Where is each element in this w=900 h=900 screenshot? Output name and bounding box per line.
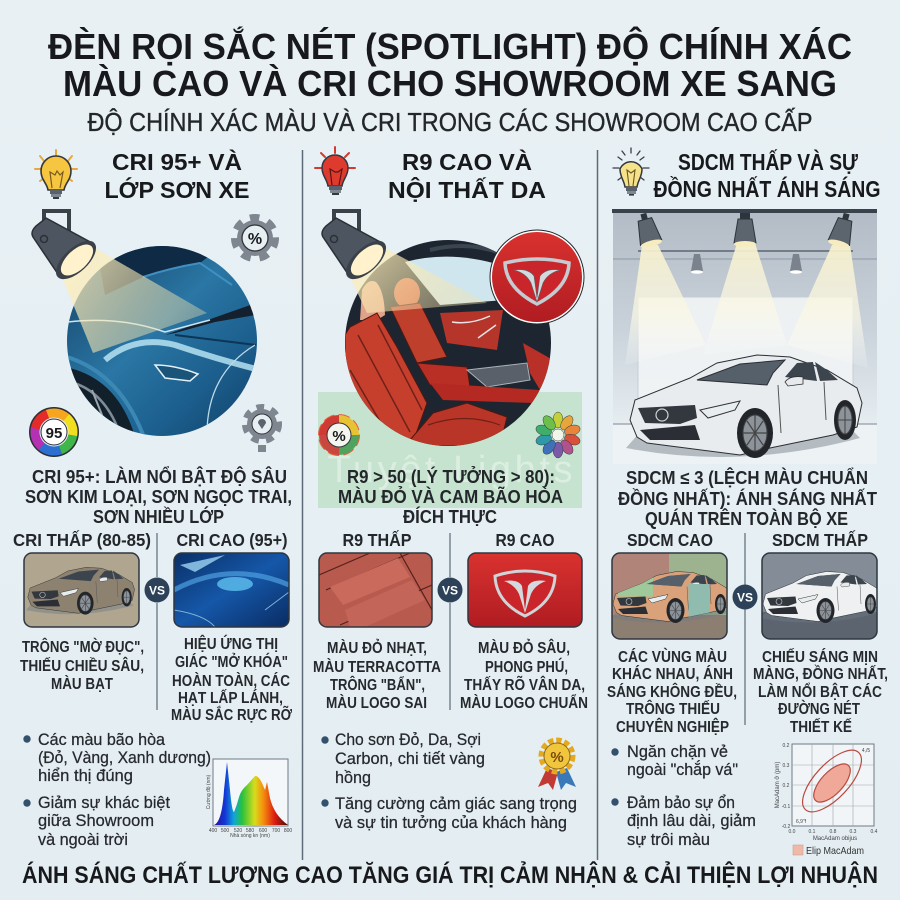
icon: CRI 95 colour wheel: 95 xyxy=(46,425,62,442)
VS badge xyxy=(438,578,462,602)
comparison: high R9: MÀU ĐỎ SÂU, xyxy=(478,639,570,657)
heading: R9 cao và nội thất da: NỘI THẤT DA xyxy=(388,176,546,203)
icon: gear percent: % xyxy=(248,231,262,248)
bullet list: R9: và sự tin tưởng của khách hàng xyxy=(335,813,567,832)
column dividers xyxy=(157,150,745,860)
bullet list: SDCM: sự trôi màu xyxy=(627,830,710,849)
heading: SDCM thấp và sự đồng nhất ánh sáng: SDCM THẤP VÀ SỰ xyxy=(678,148,858,175)
comparison: low CRI: THIẾU CHIỀU SÂU, xyxy=(20,657,144,675)
description: SDCM xyxy=(618,467,877,529)
chart: MacAdam ellipse: -0.1 xyxy=(782,804,791,810)
chart: light spectrum: 800 xyxy=(284,828,292,834)
chart: MacAdam ellipse: 0.3 xyxy=(850,829,857,835)
light beam xyxy=(62,247,207,353)
bullet list: SDCM: ngoài "chắp vá" xyxy=(627,760,738,779)
comparison: low SDCM: SDCM THẤP xyxy=(772,529,868,550)
title xyxy=(48,25,852,104)
bullet list: CRI: Các màu bão hòa xyxy=(38,730,166,749)
VS badge xyxy=(732,584,758,610)
comparison: low CRI xyxy=(13,529,151,693)
watermark xyxy=(318,392,582,508)
icon: gear pin xyxy=(247,409,277,452)
comparison: high CRI: HIỆU ỨNG THỊ xyxy=(184,635,278,653)
car paint close-up circle xyxy=(67,246,257,436)
description: CRI 95+: SƠN NHIỀU LỚP xyxy=(93,506,224,527)
VS badge: VS xyxy=(442,584,458,598)
icon: medal: % xyxy=(550,749,564,766)
description: R9: R9 > 50 (LÝ TƯỞNG > 80): xyxy=(347,466,555,487)
heading: R9 cao và nội thất da xyxy=(388,148,546,203)
description: CRI 95+ xyxy=(25,466,292,527)
showroom scene xyxy=(612,209,877,464)
chart: MacAdam ellipse: Elip MacAdam xyxy=(806,845,864,857)
watermark: Tuyệt Lights xyxy=(328,449,572,491)
chart: light spectrum: 500 xyxy=(221,828,229,834)
comparison: high SDCM: CÁC VÙNG MÀU xyxy=(618,648,727,666)
comparison: high SDCM: KHÁC NHAU, ÁNH xyxy=(612,666,733,683)
VS badge: VS xyxy=(149,584,165,598)
comparison: low CRI: CRI THẤP (80-85) xyxy=(13,529,151,550)
track lights xyxy=(633,211,857,274)
subtitle: ĐỘ CHÍNH XÁC MÀU VÀ CRI TRONG CÁC SHOWROOM CAO CẤP xyxy=(88,107,812,137)
description: CRI 95+: SƠN KIM LOẠI, SƠN NGỌC TRAI, xyxy=(25,487,292,507)
chart: light spectrum: 400 xyxy=(209,828,217,834)
comparison: high CRI: HẠT LẤP LÁNH, xyxy=(178,690,283,707)
chart: light spectrum: 520 xyxy=(234,828,242,834)
chart: MacAdam ellipse: MacAdam ở (pm) xyxy=(774,762,781,808)
icon: pale light bulb xyxy=(613,148,649,196)
comparison: high CRI: MÀU SẮC RỰC RỠ xyxy=(171,706,293,724)
description: R9: MÀU ĐỎ VÀ CAM BÃO HÒA xyxy=(338,486,563,507)
heading: CRI 95+ và lớp sơn xe xyxy=(104,148,250,203)
bullet list: SDCM: Đảm bảo sự ổn xyxy=(627,793,735,812)
chart: light spectrum: 580 xyxy=(246,828,254,834)
bullet list: SDCM xyxy=(611,742,756,849)
icon: spotlight xyxy=(322,211,392,286)
icon: medal xyxy=(538,742,576,790)
chart: MacAdam ellipse: 0.2 xyxy=(783,783,790,789)
icon: gear percent xyxy=(237,220,273,256)
comparison: low SDCM: THIẾT KẾ xyxy=(790,719,852,736)
icon: colour flower xyxy=(535,412,581,458)
description: R9 xyxy=(338,466,563,527)
panel: R9 and leather interior xyxy=(313,147,588,832)
bullet list: R9: Cho sơn Đỏ, Da, Sợi xyxy=(335,730,481,749)
bullet list: SDCM: Ngăn chặn vẻ xyxy=(627,742,728,761)
comparison: high SDCM: SDCM CAO xyxy=(627,530,713,550)
comparison: high R9 xyxy=(460,530,588,712)
description: SDCM: ĐỒNG NHẤT): ÁNH SÁNG NHẤT xyxy=(618,488,877,509)
white car xyxy=(626,355,862,458)
comparison: high CRI: CRI CAO (95+) xyxy=(176,530,288,550)
chart: MacAdam ellipse: 0.3 xyxy=(783,763,790,769)
leather interior circle xyxy=(340,240,555,450)
description: SDCM: QUÁN TRÊN TOÀN BỘ XE xyxy=(645,508,848,529)
icon: spotlight xyxy=(32,211,102,286)
chart: MacAdam ellipse: 4,/5 xyxy=(862,748,870,754)
bullet list: CRI: giữa Showroom xyxy=(38,811,154,830)
chart: light spectrum: 700 xyxy=(272,828,280,834)
title: ĐÈN RỌI SẮC NÉT (SPOTLIGHT) ĐỘ CHÍNH XÁC xyxy=(48,25,852,67)
panel: SDCM and light uniformity xyxy=(607,148,888,857)
bullet list: CRI: Giảm sự khác biệt xyxy=(38,793,170,812)
chart: light spectrum: Cường độ (nm) xyxy=(206,774,212,809)
comparison: low R9: R9 THẤP xyxy=(342,529,412,550)
panel: CRI 95+ and car paint xyxy=(13,148,293,849)
chart: MacAdam ellipse: -0.2 xyxy=(782,824,791,830)
bullet list: R9: Tăng cường cảm giác sang trọng xyxy=(335,794,577,813)
comparison: low SDCM: ĐƯỜNG NÉT xyxy=(778,700,860,718)
icon: colourful percent gear xyxy=(319,415,359,455)
chart: MacAdam ellipse: 0.2 xyxy=(783,743,790,749)
description: CRI 95+: CRI 95+: LÀM NỔI BẬT ĐỘ SÂU xyxy=(32,466,287,487)
comparison: low R9: MÀU ĐỎ NHẠT, xyxy=(327,639,427,657)
bullet list: R9: Carbon, chi tiết vàng xyxy=(335,749,485,768)
comparison: high R9: R9 CAO xyxy=(496,530,554,550)
description: R9: ĐÍCH THỰC xyxy=(403,506,497,527)
comparison: low R9 xyxy=(313,529,441,712)
chart: light spectrum: Nhà sóng kn (nm) xyxy=(230,833,270,839)
VS badge xyxy=(144,578,170,602)
comparison: low R9: MÀU LOGO SAI xyxy=(326,695,427,712)
comparison: low R9: TRÔNG "BẨN", xyxy=(330,676,425,694)
comparison: high SDCM: TRÔNG THIẾU xyxy=(626,700,720,718)
comparison: high SDCM: CHUYÊN NGHIỆP xyxy=(616,718,729,736)
chart: MacAdam ellipse: 0.4 xyxy=(871,829,878,835)
description: SDCM: SDCM ≤ 3 (LỆCH MÀU CHUẨN xyxy=(626,467,868,488)
chart: MacAdam ellipse: MacAdam obijus xyxy=(813,836,857,842)
bullet list: CRI: (Đỏ, Vàng, Xanh dương) xyxy=(38,748,211,767)
comparison: high R9: THẤY RÕ VÂN DA, xyxy=(464,676,585,694)
chart: MacAdam ellipse: 0.8 xyxy=(830,829,837,835)
comparison: low SDCM xyxy=(753,529,888,736)
chart: light spectrum: 600 xyxy=(259,828,267,834)
comparison: high R9: MÀU LOGO CHUẨN xyxy=(460,694,588,712)
icon: yellow light bulb xyxy=(35,150,77,199)
comparison: low SDCM: LÀM NỔI BẬT CÁC xyxy=(758,683,882,701)
comparison: low SDCM: CHIẾU SÁNG MỊN xyxy=(762,649,878,666)
icon: CRI 95 colour wheel xyxy=(27,405,81,459)
bullet list: R9 xyxy=(321,730,577,832)
comparison: low CRI: MÀU BẠT xyxy=(51,676,113,693)
comparison: low CRI: TRÔNG "MỜ ĐỤC", xyxy=(22,638,144,656)
chart: MacAdam ellipse xyxy=(774,741,878,857)
light beam xyxy=(350,247,487,313)
bullet list: CRI xyxy=(23,730,211,849)
chart: MacAdam ellipse: 0.0 xyxy=(789,829,796,835)
chart: MacAdam ellipse: 6,9"f xyxy=(796,819,807,825)
comparison: high CRI: GIÁC "MỞ KHÓA" xyxy=(175,653,288,671)
heading: SDCM thấp và sự đồng nhất ánh sáng xyxy=(654,148,880,202)
logo badge xyxy=(490,230,584,324)
bullet list: R9: hồng xyxy=(335,768,371,787)
bullet list: SDCM: định lâu dài, giảm xyxy=(627,811,756,830)
comparison: high SDCM: SÁNG KHÔNG ĐỀU, xyxy=(607,683,737,701)
chart: light spectrum xyxy=(206,759,292,839)
bullet list: CRI: và ngoài trời xyxy=(38,830,128,849)
bullet list: CRI: hiển thị đúng xyxy=(38,766,133,785)
heading: R9 cao và nội thất da: R9 CAO VÀ xyxy=(402,148,532,175)
heading: CRI 95+ và lớp sơn xe: LỚP SƠN XE xyxy=(104,176,250,203)
icon: red light bulb xyxy=(315,147,355,195)
heading: CRI 95+ và lớp sơn xe: CRI 95+ VÀ xyxy=(112,148,242,175)
VS badge: VS xyxy=(737,590,753,604)
comparison: high SDCM xyxy=(607,530,737,736)
comparison: low R9: MÀU TERRACOTTA xyxy=(313,659,441,676)
comparison: high CRI: HOÀN TOÀN, CÁC xyxy=(172,673,290,690)
comparison: high CRI xyxy=(171,530,293,724)
title: MÀU CAO VÀ CRI CHO SHOWROOM XE SANG xyxy=(63,63,837,104)
chart: MacAdam ellipse: 0.1 xyxy=(809,829,816,835)
icon: colourful percent gear: % xyxy=(332,428,346,445)
comparison: high R9: PHONG PHÚ, xyxy=(485,658,568,676)
